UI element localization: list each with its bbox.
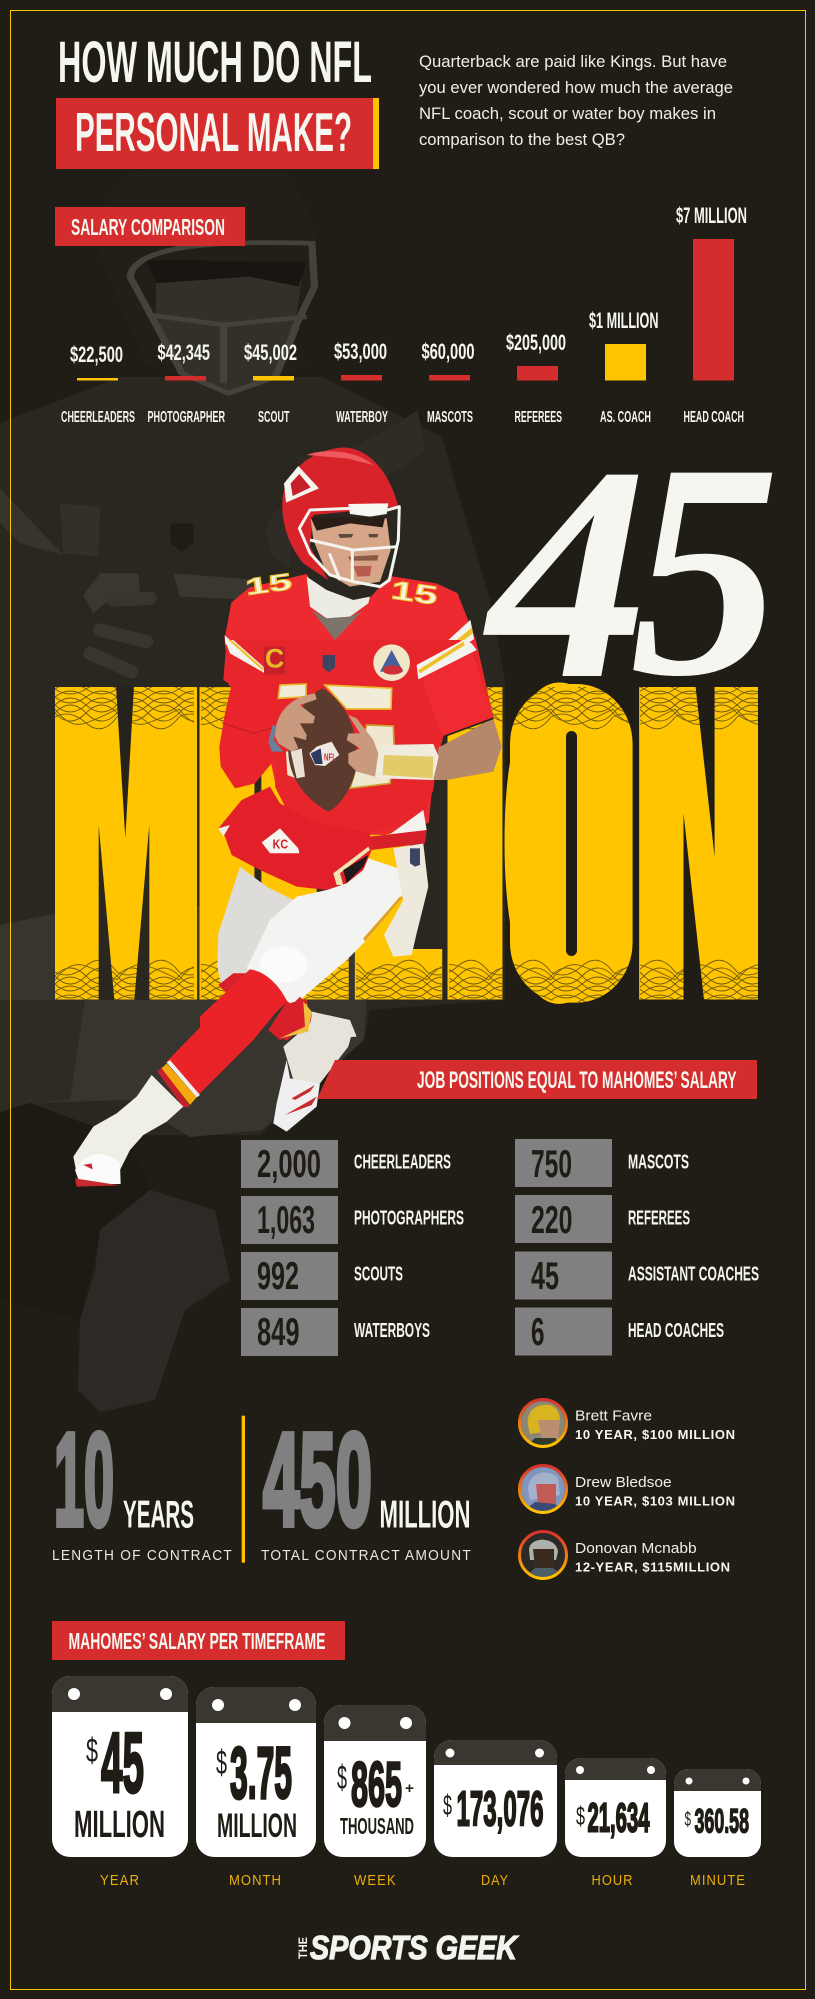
bar: head coach — [676, 203, 747, 426]
letters as text: I — [422, 588, 528, 1096]
bar: mascots: $60,000 — [422, 339, 474, 364]
football — [288, 688, 357, 812]
avatar: Brett Favre — [518, 1398, 568, 1448]
calendar: year — [52, 1676, 188, 1857]
contract length stat: LENGTH OF CONTRACT — [52, 1547, 233, 1564]
total contract stat: 450 — [263, 1406, 372, 1553]
divider — [242, 1416, 245, 1563]
sleeve stripes — [225, 635, 262, 674]
logo: The Sports Geek: THE — [296, 1937, 310, 1959]
calendar: minute: 360.58 — [694, 1802, 749, 1840]
row: scouts: SCOUTS — [354, 1264, 403, 1286]
intro paragraph: NFL coach, scout or water boy makes in — [419, 104, 716, 123]
front thigh — [247, 857, 403, 1003]
face — [311, 518, 391, 587]
row: waterboys — [241, 1308, 430, 1356]
left arm sleeve — [219, 673, 280, 788]
ghost player background image — [0, 169, 505, 1412]
calendar: week — [324, 1705, 426, 1857]
head and helmet — [244, 447, 440, 640]
comparison: Brett Favre: Brett Favre — [575, 1408, 652, 1424]
comparison: Brett Favre: 10 YEAR, $100 MILLION — [575, 1427, 735, 1442]
calendar: week: $ — [337, 1759, 347, 1797]
lower torso — [223, 640, 493, 833]
wrist tape — [375, 744, 439, 780]
torso, arms, ball and pants — [200, 640, 502, 1040]
row: referees: REFEREES — [628, 1208, 690, 1230]
intro paragraph: comparison to the best QB? — [419, 130, 625, 149]
bar: waterboy: $53,000 — [334, 339, 387, 364]
contract length stat: YEARS — [123, 1494, 194, 1536]
forward leg and lifted cleat — [73, 993, 283, 1187]
ball logo — [309, 742, 339, 766]
row: waterboys: WATERBOYS — [354, 1320, 430, 1342]
comparison: Drew Bledsoe: Drew Bledsoe — [575, 1474, 672, 1491]
ghost helmet — [99, 169, 317, 393]
helmet arrowhead — [284, 466, 319, 503]
calendar: minute: $ — [684, 1809, 691, 1831]
contract length stat: 10 — [54, 1406, 114, 1553]
bar: photographer: $42,345 — [158, 340, 210, 365]
bar: referees — [506, 330, 566, 426]
NFL shield — [323, 655, 335, 672]
row: cheerleaders: 2,000 — [257, 1143, 321, 1186]
calendar: month: $ — [216, 1744, 227, 1782]
jersey shoulder number left: 15 — [244, 568, 294, 600]
calendar: hour: $ — [576, 1801, 585, 1831]
red sock — [200, 969, 287, 1040]
bar: cheerleaders — [61, 342, 135, 426]
row: head coaches: HEAD COACHES — [628, 1320, 724, 1342]
bar: mascots: MASCOTS — [427, 409, 473, 426]
row: head coaches: 6 — [531, 1311, 544, 1354]
bar: photographer: PHOTOGRAPHER — [148, 409, 225, 426]
salary per timeframe heading: MAHOMES’ SALARY PER TIMEFRAME — [68, 1628, 326, 1654]
big number 45: 4 — [483, 404, 648, 743]
row: mascots: 750 — [531, 1143, 572, 1186]
avatar: Donovan Mcnabb — [518, 1530, 568, 1580]
row: mascots: MASCOTS — [628, 1152, 689, 1174]
intro paragraph — [419, 52, 733, 149]
letters as text — [44, 588, 758, 1097]
comparison: Donovan Mcnabb — [518, 1530, 730, 1580]
chest number — [278, 684, 306, 698]
salary comparison heading: SALARY COMPARISON — [71, 214, 225, 240]
calendar: month: 3.75 — [230, 1733, 292, 1814]
salary comparison heading — [55, 207, 245, 246]
total contract stat: MILLION — [380, 1494, 470, 1536]
bar: cheerleaders: CHEERLEADERS — [61, 409, 135, 426]
calendar: day: 173,076 — [456, 1782, 544, 1836]
calendar: year: 45 — [101, 1716, 144, 1811]
letters as text: M — [44, 590, 210, 1097]
bar: referees: $205,000 — [506, 330, 566, 355]
calendar: month: MILLION — [217, 1807, 297, 1845]
rear thigh — [217, 867, 300, 987]
title line one: HOW MUCH DO NFL — [58, 30, 372, 95]
letter bodies — [55, 684, 758, 1003]
upper jersey — [225, 574, 494, 835]
job positions heading — [317, 1060, 757, 1099]
intro paragraph: you ever wondered how much the average — [419, 78, 733, 97]
bar: waterboy: WATERBOY — [336, 409, 388, 426]
left hand — [275, 693, 317, 752]
avatar: Drew Bledsoe — [518, 1464, 568, 1514]
bar: scout: SCOUT — [258, 409, 290, 426]
row: mascots — [515, 1139, 689, 1187]
facemask — [299, 507, 399, 587]
forearm — [433, 718, 502, 780]
letters as text: L — [250, 589, 354, 1096]
right hand — [347, 715, 378, 777]
back knee sock red — [218, 973, 250, 993]
chest badge — [373, 644, 410, 681]
letters as text: O — [498, 590, 622, 1097]
arrowhead logo — [262, 828, 299, 853]
towel — [384, 843, 428, 957]
timeframe labels: YEAR — [100, 1872, 140, 1889]
jersey shoulder number right: 15 — [389, 575, 440, 611]
rear leg and planted cleat — [268, 997, 353, 1132]
ball logo: NFL — [324, 753, 336, 764]
row: scouts: 992 — [257, 1255, 299, 1298]
letters as text: I — [174, 588, 280, 1096]
captain patch: C — [265, 643, 284, 673]
total contract stat: TOTAL CONTRACT AMOUNT — [261, 1547, 472, 1564]
bar: scout — [244, 340, 297, 426]
row: photographers: PHOTOGRAPHERS — [354, 1208, 464, 1230]
timeframe labels: WEEK — [354, 1872, 397, 1889]
calendar: year: MILLION — [74, 1804, 165, 1846]
salary bar chart — [61, 203, 747, 426]
jersey tail — [218, 787, 372, 890]
timeframe labels: MONTH — [229, 1872, 282, 1889]
bar: scout: $45,002 — [244, 340, 297, 365]
row: assistant coaches: 45 — [531, 1255, 559, 1298]
calendar: week: + — [405, 1780, 414, 1797]
letters as text: L — [344, 589, 447, 1096]
bar: assistant coach — [589, 308, 658, 426]
comparison: Drew Bledsoe: 10 YEAR, $103 MILLION — [575, 1494, 735, 1508]
row: assistant coaches — [515, 1252, 759, 1300]
calendar: hour — [565, 1758, 666, 1857]
bar: referees: REFEREES — [514, 409, 562, 426]
big word MILLION — [40, 588, 770, 1097]
timeframe labels: MINUTE — [690, 1872, 746, 1889]
comparison: Donovan Mcnabb: 12-YEAR, $115MILLION — [575, 1560, 730, 1574]
bar: assistant coach: AS. COACH — [600, 409, 651, 426]
sleeve right — [420, 650, 493, 737]
timeframe labels: DAY — [481, 1872, 509, 1889]
lace bands — [55, 687, 758, 730]
calendar: month — [196, 1687, 316, 1857]
bar: head coach: HEAD COACH — [684, 409, 744, 426]
bar: head coach: $7 MILLION — [676, 203, 747, 228]
comparison: Brett Favre — [518, 1398, 735, 1448]
row: photographers: 1,063 — [257, 1199, 315, 1242]
calendar: day: $ — [443, 1790, 452, 1822]
bar: waterboy — [334, 339, 388, 426]
row: scouts — [241, 1252, 403, 1300]
calendar: week: 865 — [351, 1750, 402, 1820]
timeframe labels — [100, 1872, 746, 1889]
O counter — [566, 731, 577, 956]
arrowhead logo: KC — [273, 836, 288, 851]
logo: The Sports Geek: SPORTS GEEK — [310, 1929, 519, 1966]
calendar: hour: 21,634 — [588, 1794, 650, 1840]
row: head coaches — [515, 1308, 724, 1356]
title banner: PERSONAL MAKE? — [75, 101, 352, 163]
row: referees: 220 — [531, 1199, 572, 1242]
player illustration — [73, 447, 502, 1187]
letter notches — [116, 686, 134, 838]
bar: cheerleaders: $22,500 — [70, 342, 123, 367]
row: cheerleaders: CHEERLEADERS — [354, 1152, 451, 1174]
bar: assistant coach: $1 MILLION — [589, 308, 658, 333]
job positions table — [241, 1139, 759, 1356]
calendar: day — [434, 1740, 557, 1857]
comparison: Donovan Mcnabb: Donovan Mcnabb — [575, 1540, 697, 1557]
bar: mascots — [422, 339, 474, 426]
big number 45 — [483, 401, 780, 743]
row: cheerleaders — [241, 1140, 451, 1188]
timeframe labels: HOUR — [592, 1872, 634, 1889]
row: referees — [515, 1195, 690, 1243]
big number 45: 5 — [630, 401, 780, 740]
calendar: minute — [674, 1769, 761, 1857]
comparison: Drew Bledsoe — [518, 1464, 735, 1514]
bar: photographer — [148, 340, 225, 426]
ghost jersey details — [0, 410, 425, 672]
intro paragraph: Quarterback are paid like Kings. But have — [419, 52, 727, 71]
calendar: year: $ — [86, 1732, 98, 1770]
title banner — [56, 98, 379, 169]
salary per timeframe heading — [52, 1621, 345, 1660]
calendar: week: THOUSAND — [340, 1813, 414, 1839]
row: photographers — [241, 1196, 464, 1244]
row: waterboys: 849 — [257, 1311, 300, 1354]
letters as text: N — [627, 590, 758, 1097]
